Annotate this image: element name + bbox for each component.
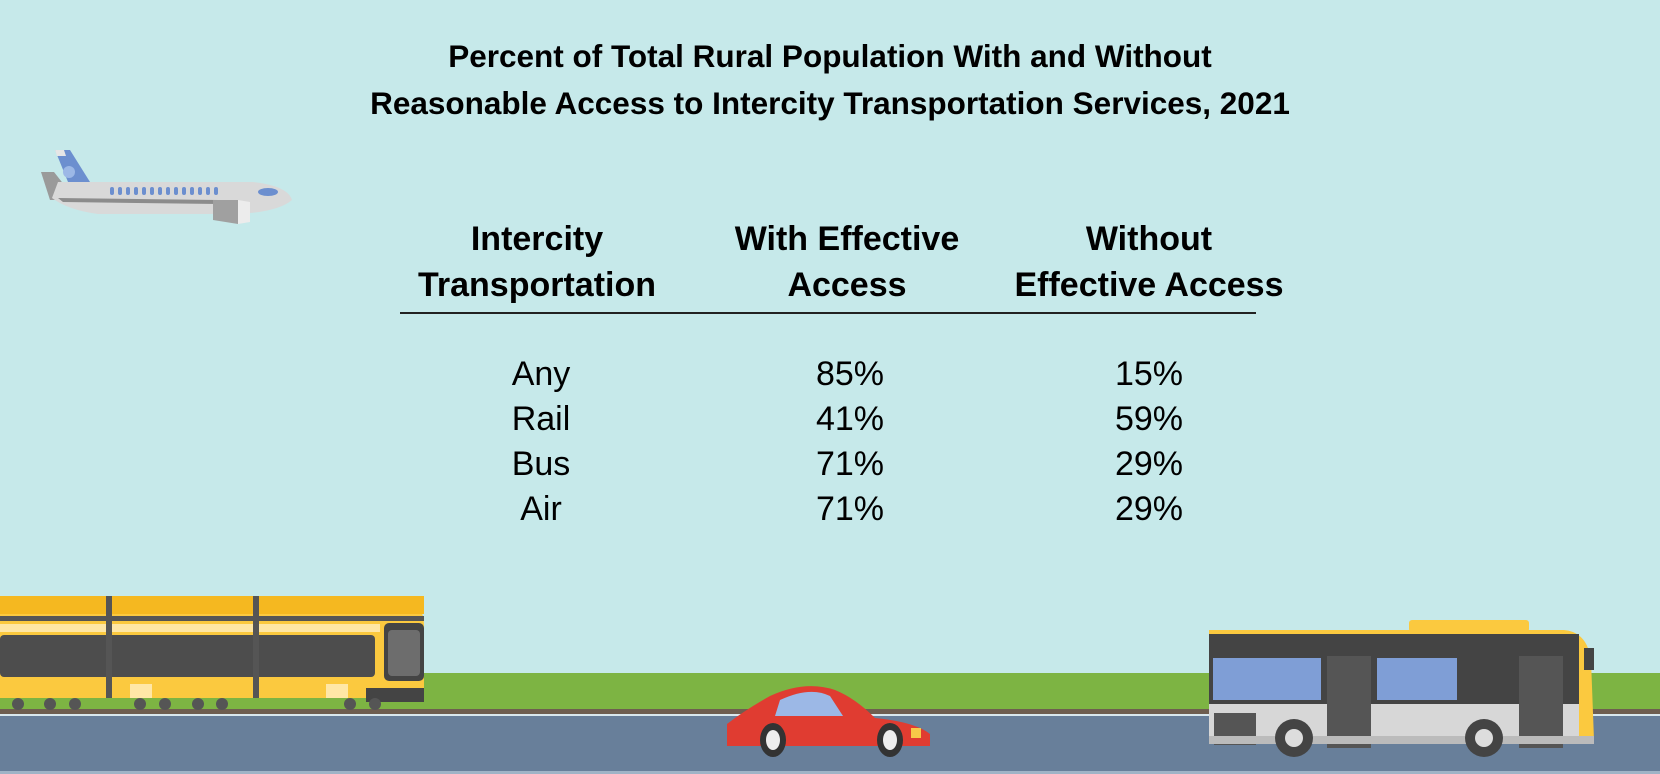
column: modes: [512, 355, 570, 528]
icon: airplane: [41, 150, 292, 224]
header: without effective access: [1014, 220, 1284, 304]
table: [400, 220, 1284, 528]
icon: car: [727, 686, 930, 757]
header: with effective access: With Effective: [735, 220, 959, 258]
title: Reasonable Access to Intercity Transportation Services, 2021: [370, 85, 1290, 121]
column: modes: Air: [520, 490, 562, 528]
header: without effective access: Without: [1086, 220, 1212, 258]
header rule: [400, 312, 1256, 314]
column: modes: Bus: [512, 445, 570, 483]
icon: bus: [1209, 620, 1594, 757]
header: with effective access: Access: [787, 266, 907, 304]
title: Percent of Total Rural Population With and Without: [448, 38, 1212, 74]
header: intercity transportation: Transportation: [418, 266, 656, 304]
column: with access: 85%: [816, 355, 884, 393]
column: without access: 29%: [1115, 490, 1183, 528]
column: modes: Rail: [512, 400, 570, 438]
column: without access: 29%: [1115, 445, 1183, 483]
column: with access: [816, 355, 884, 528]
icon: train: [0, 596, 424, 710]
column: without access: [1115, 355, 1183, 528]
header: without effective access: Effective Access: [1014, 266, 1284, 304]
column: without access: 59%: [1115, 400, 1183, 438]
header: intercity transportation: Intercity: [471, 220, 603, 258]
column: modes: Any: [512, 355, 570, 393]
column: with access: 41%: [816, 400, 884, 438]
column: without access: 15%: [1115, 355, 1183, 393]
header: with effective access: [734, 220, 959, 304]
column: with access: 71%: [816, 490, 884, 528]
header: intercity transportation: [418, 220, 656, 304]
column: with access: 71%: [816, 445, 884, 483]
title: [370, 38, 1290, 121]
